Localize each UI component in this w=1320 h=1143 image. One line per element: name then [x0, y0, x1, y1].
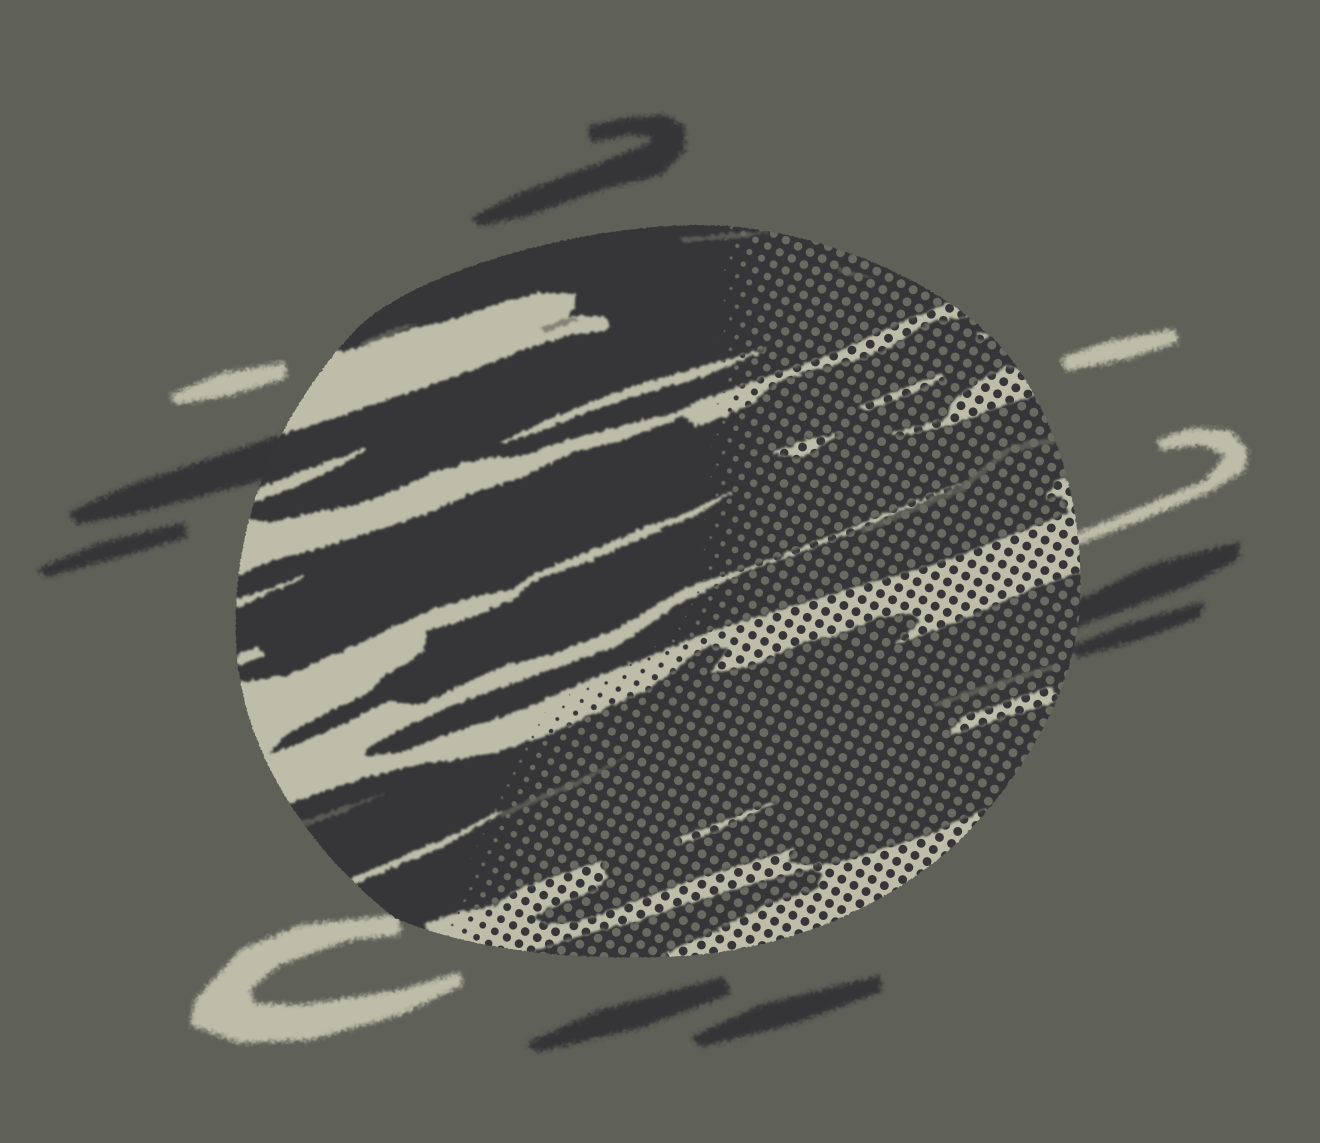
right upper stroke — [1075, 544, 1238, 626]
left short stroke — [41, 525, 185, 575]
dark brush strokes around planet — [41, 117, 1238, 1050]
right light hook — [1075, 428, 1248, 546]
dark halftone dots on light areas — [450, 304, 1080, 958]
left long stroke — [72, 434, 300, 522]
bottom left light hook — [190, 914, 463, 1043]
icon: top hook stroke — [474, 117, 683, 224]
bottom stroke two — [694, 978, 880, 1045]
bottom stroke one — [530, 979, 728, 1050]
dark bands with gray halftone dots — [235, 224, 1081, 958]
right light dash — [1064, 331, 1176, 369]
planet with halftone bands — [235, 224, 1081, 958]
right lower stroke — [1072, 604, 1203, 655]
left light dash — [172, 364, 285, 403]
planet light base — [236, 290, 1081, 957]
light brush strokes around planet — [172, 331, 1248, 1043]
faint gray streaks across dark bands — [297, 232, 1057, 828]
